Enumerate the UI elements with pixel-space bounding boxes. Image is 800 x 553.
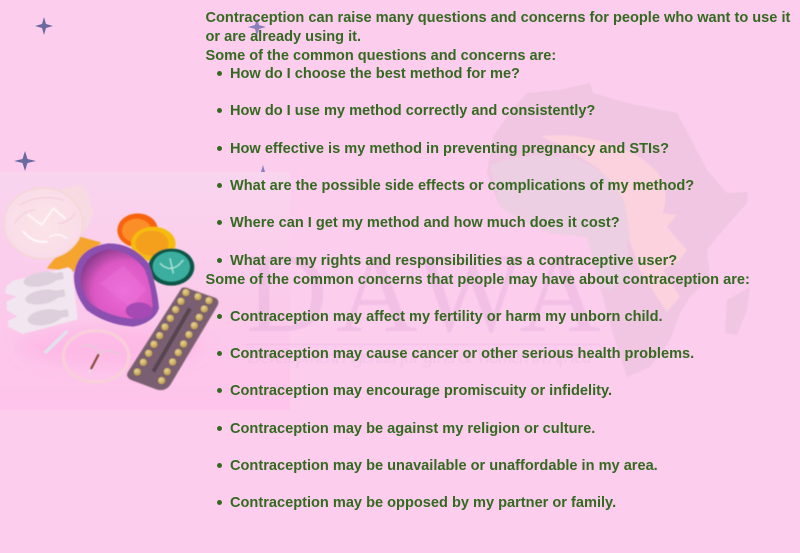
question 2: How do I use my method correctly and consistently? xyxy=(230,103,595,119)
concern 5: Contraception may be unavailable or unaffordable in my area. xyxy=(230,458,658,474)
question 1: How do I choose the best method for me? xyxy=(230,66,520,82)
Africa silhouette xyxy=(487,83,750,377)
orange condom xyxy=(117,213,158,247)
intro paragraph xyxy=(206,10,790,64)
question 3: How effective is my method in preventing pregnancy and STIs? xyxy=(230,141,669,157)
concern 2: Contraception may cause cancer or other serious health problems. xyxy=(230,346,694,362)
concern 1: Contraception may affect my fertility or harm my unborn child. xyxy=(230,309,663,325)
wordmark tagline: Development Agenda for girls & Women in Africa xyxy=(246,346,592,368)
question 6: What are my rights and responsibilities as a contraceptive user? xyxy=(230,253,677,269)
star: top left xyxy=(35,17,53,35)
intro paragraph: Some of the common questions and concerns are: xyxy=(206,48,556,64)
suppository blister pack xyxy=(5,267,78,334)
sparkle stars xyxy=(14,17,266,172)
intro paragraph: Contraception can raise many questions and concerns for people who want to use it xyxy=(206,10,790,26)
intro paragraph: or are already using it. xyxy=(206,29,361,45)
concern 3: Contraception may encourage promiscuity or infidelity. xyxy=(230,383,612,399)
teal condom xyxy=(148,248,194,286)
purple diaphragm xyxy=(74,243,159,327)
DAWA wordmark: DAWA xyxy=(246,231,601,356)
concern 4: Contraception may be against my religion or culture. xyxy=(230,421,595,437)
star: small partial xyxy=(261,165,265,172)
orange paper xyxy=(47,237,102,272)
pill blister pack xyxy=(127,288,218,390)
implant rod xyxy=(46,332,66,352)
photo background xyxy=(0,172,290,410)
grey head profile xyxy=(490,156,632,290)
yellow condom xyxy=(131,227,176,261)
watermark: Africa map and DAWA logo xyxy=(245,83,750,377)
star: top centre xyxy=(248,18,266,36)
star: left middle xyxy=(14,151,36,171)
concerns heading: Some of the common concerns that people may have about contraception are: xyxy=(206,272,750,288)
peach head profile xyxy=(540,135,687,312)
IUD xyxy=(82,345,120,373)
female condom xyxy=(4,184,93,259)
concern 6: Contraception may be opposed by my partner or family. xyxy=(230,495,616,511)
pills xyxy=(133,289,213,385)
wordmark rule xyxy=(245,344,601,345)
question 4: What are the possible side effects or complications of my method? xyxy=(230,178,694,194)
pink shadow glow xyxy=(17,327,203,367)
photo: contraceptive methods xyxy=(4,184,218,390)
vaginal ring xyxy=(63,331,129,382)
question 5: Where can I get my method and how much does it cost? xyxy=(230,215,620,231)
